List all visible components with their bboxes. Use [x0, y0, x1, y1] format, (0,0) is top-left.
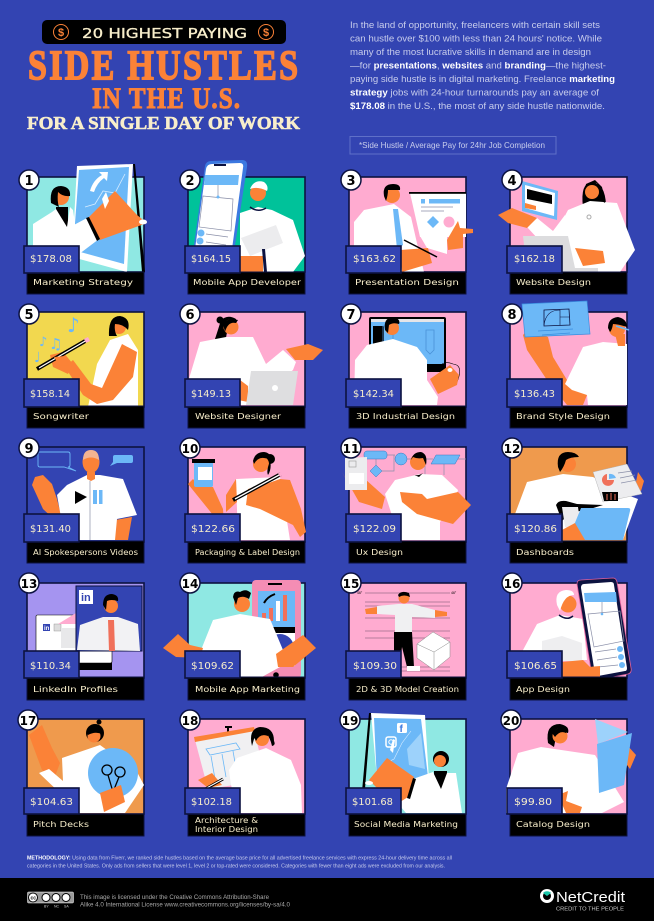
methodology: METHODOLOGY: Using data from Fiverr, we ranked side hustles based on the average base price for all advertised freelance services with express 24-hour delivery time across all: [27, 856, 452, 862]
header banner: 20 highest paying: [42, 20, 286, 44]
card 19: Social Media Marketing: 19: [342, 714, 358, 728]
illustration: 3D model figure and cube: 46°: [451, 591, 457, 595]
illustration: woman holding brand sheet: [522, 301, 629, 405]
card 20: Catalog Design: $99.80: [514, 797, 552, 808]
card 5: Songwriter: 5: [24, 308, 34, 323]
illustration: 3D model figure and cube: 46°: [357, 591, 363, 595]
card 11: UX Design: 11: [343, 442, 359, 456]
card 2: Mobile App Developer: Mobile App Developer: [193, 278, 302, 287]
card 12: Dashboards: $120.86: [514, 524, 557, 535]
label text: Interior Design: [195, 825, 258, 834]
card 10: Packaging & Label Design: [180, 438, 306, 563]
card 7: 3D Industrial Design: 7: [346, 308, 356, 323]
card 11: UX Design: Ux Design: [356, 548, 403, 557]
intro paragraph: paying side hustle is in digital marketing. Freelance marketing: [350, 73, 615, 84]
license badge: cc: [30, 896, 36, 902]
card 3: Presentation Design: Presentation Design: [355, 278, 459, 287]
card 9: AI Spokespersons Videos: $131.40: [30, 524, 71, 535]
card 3: Presentation Design: [341, 170, 473, 294]
intro paragraph: [350, 19, 615, 111]
header banner: 20 highest paying: $: [263, 27, 269, 39]
intro paragraph: strategy jobs with 24-hour turnarounds pay an average of: [350, 86, 599, 98]
card 19: Social Media Marketing: $101.68: [352, 797, 393, 808]
card 14: Mobile App Marketing: $109.62: [191, 661, 234, 672]
illustration: songwriter with pencil and notes: [34, 313, 138, 407]
card 9: AI Spokespersons Videos: [19, 438, 144, 563]
card 7: 3D Industrial Design: [341, 304, 466, 428]
license text: This image is licensed under the Creative Commons Attribution-Share: [80, 894, 269, 901]
illustration: woman with idea bulb: [29, 720, 144, 813]
intro paragraph: can hustle over $100 with less than 24 hours' notice. While: [350, 32, 602, 44]
illustration: woman with jar and pencil: [188, 452, 306, 540]
card 18: Architecture & Interior Design: [180, 710, 305, 836]
illustration: woman at chart board: [33, 164, 147, 272]
card 8: Brand Style Design: $136.43: [514, 389, 555, 400]
title: side hustles: SIDE HUSTLES: [28, 43, 298, 89]
card 17: Pitch Decks: $104.63: [30, 797, 73, 808]
intro paragraph: $178.08 in the U.S., the most of any side hustle nationwide.: [350, 100, 605, 111]
NetCredit logo: CREDIT TO THE PEOPLE: [556, 906, 624, 912]
illustration: man holding catalog: [506, 719, 636, 813]
card 9: AI Spokespersons Videos: AI Spokespersons Videos: [33, 548, 138, 557]
header banner: 20 highest paying: 20 HIGHEST PAYING: [82, 27, 247, 42]
card 14: Mobile App Marketing: Mobile App Marketing: [195, 685, 300, 694]
card 16: App Design: App Design: [516, 685, 570, 694]
card 10: Packaging & Label Design: Packaging & Label Design: [195, 548, 300, 557]
card 16: App Design: [502, 573, 631, 700]
card 14: Mobile App Marketing: [163, 573, 316, 700]
card 18: Architecture & Interior Design: 18: [182, 714, 198, 728]
card 15: 2D & 3D Model Creation: $109.30: [353, 661, 397, 672]
card 13: LinkedIn Profiles: [19, 573, 144, 700]
illustration: designer at monitor: [354, 317, 460, 405]
card 12: Dashboards: [502, 438, 644, 563]
card 2: Mobile App Developer: 2: [185, 174, 195, 189]
card 18: Architecture & Interior Design: $102.18: [191, 797, 232, 808]
license text: Alike 4.0 International License www.creativecommons.org/licenses/by-sa/4.0: [80, 902, 290, 908]
illustration: 3D model figure and cube: [357, 591, 457, 671]
card 8: Brand Style Design: Brand Style Design: [516, 412, 610, 421]
card 16: App Design: $106.65: [514, 661, 557, 672]
illustration: LinkedIn profile: in: [81, 592, 91, 604]
card 7: 3D Industrial Design: $142.34: [353, 389, 394, 400]
card 13: LinkedIn Profiles: 13: [21, 577, 37, 591]
card 13: LinkedIn Profiles: $110.34: [30, 661, 71, 672]
header banner: 20 highest paying: $: [58, 27, 64, 39]
card 2: Mobile App Developer: [180, 160, 305, 294]
card 4: Website Design: Website Design: [516, 278, 591, 287]
illustration: developer and phone: [193, 160, 305, 272]
illustration: LinkedIn profile: [36, 586, 142, 670]
intro paragraph: —for presentations, websites and branding—the highest-: [350, 60, 606, 70]
card 1: Marketing Strategy: $178.08: [30, 254, 72, 265]
label text: [195, 816, 258, 834]
title: in the U.S.: IN THE U.S.: [92, 81, 240, 115]
illustration: woman with laptop and screen: [498, 180, 635, 272]
card 1: Marketing Strategy: 1: [24, 174, 34, 189]
card 20: Catalog Design: [501, 710, 636, 836]
license badge: SA: [64, 904, 69, 908]
illustration: social media board: f: [400, 724, 404, 735]
methodology: [27, 856, 452, 870]
illustration: marketer and phone: [163, 580, 316, 678]
NetCredit logo: NetCredit: [556, 889, 626, 906]
illustration: UX designer with flowchart: [342, 451, 471, 540]
card 8: Brand Style Design: [502, 301, 629, 428]
card 1: Marketing Strategy: Marketing Strategy: [33, 278, 134, 287]
card 6: Website Designer: [180, 304, 323, 428]
intro paragraph: In the land of opportunity, freelancers with certain skill sets: [350, 19, 600, 30]
card 17: Pitch Decks: 17: [20, 714, 36, 728]
card 17: Pitch Decks: [18, 710, 144, 836]
card 4: Website Design: 4: [507, 174, 517, 189]
card 10: Packaging & Label Design: $122.66: [191, 524, 235, 535]
card 19: Social Media Marketing: [340, 710, 466, 836]
card 20: Catalog Design: 20: [503, 714, 519, 728]
license badge: [28, 892, 74, 908]
card 15: 2D & 3D Model Creation: [341, 573, 466, 700]
illustration: songwriter with pencil and notes: ♪: [39, 335, 47, 350]
subtitle: FOR A SINGLE DAY OF WORK: [27, 113, 300, 133]
card 12: Dashboards: Dashboards: [516, 548, 574, 557]
intro paragraph: many of the most lucrative skills in demand are in design: [350, 46, 591, 57]
card 9: AI Spokespersons Videos: 9: [24, 442, 34, 457]
illustration: man with reports and tablet: [515, 452, 644, 540]
card 6: Website Designer: $149.13: [191, 389, 231, 400]
card 11: UX Design: [341, 438, 471, 563]
card 5: Songwriter: Songwriter: [33, 412, 90, 421]
card 17: Pitch Decks: Pitch Decks: [33, 820, 89, 829]
card 16: App Design: 16: [504, 577, 520, 591]
illustration: architect at drawing board: [194, 727, 302, 813]
methodology: categories in the United States. Only ads from sellers that were level 1, level 2 or top-rated were considered. Categories with fewer than eight ads were excluded from our analysis.: [27, 864, 445, 870]
card 11: UX Design: $122.09: [353, 524, 396, 535]
card 6: Website Designer: 6: [185, 308, 195, 323]
card 13: LinkedIn Profiles: LinkedIn Profiles: [33, 685, 118, 694]
card 2: Mobile App Developer: $164.15: [191, 254, 231, 265]
license badge: NC: [54, 904, 60, 908]
illustration: songwriter with pencil and notes: ♪: [67, 313, 80, 337]
card 5: Songwriter: [19, 304, 144, 428]
card 6: Website Designer: Website Designer: [195, 412, 282, 421]
card 1: Marketing Strategy: [19, 164, 147, 294]
illustration: LinkedIn profile: in: [44, 626, 50, 632]
card 8: Brand Style Design: 8: [507, 308, 517, 323]
card 15: 2D & 3D Model Creation: 2D & 3D Model Creation: [356, 685, 459, 694]
card 7: 3D Industrial Design: 3D Industrial Design: [356, 412, 455, 421]
legend note: [350, 136, 556, 154]
illustration: AI spokesperson: [32, 450, 137, 540]
NetCredit logo: [542, 889, 626, 912]
card 3: Presentation Design: 3: [346, 174, 356, 189]
illustration: songwriter with pencil and notes: ♩: [34, 350, 41, 366]
card 12: Dashboards: 12: [504, 442, 520, 456]
label text: Architecture &: [195, 816, 258, 825]
footer bar: [0, 878, 654, 921]
illustration: woman with laptop: [188, 316, 323, 405]
illustration: app designer with phone: [523, 578, 631, 680]
legend note: *Side Hustle / Average Pay for 24hr Job Completion: [359, 140, 545, 150]
illustration: songwriter with pencil and notes: ♫: [49, 335, 62, 353]
card 19: Social Media Marketing: Social Media Marketing: [354, 820, 458, 829]
card 4: Website Design: $162.18: [514, 254, 555, 265]
license text: [80, 894, 290, 908]
license badge: BY: [44, 904, 49, 908]
card 3: Presentation Design: $163.62: [353, 254, 396, 265]
card 4: Website Design: [498, 170, 635, 294]
illustration: presenter and board: [354, 184, 473, 272]
card 15: 2D & 3D Model Creation: 15: [343, 577, 359, 591]
card 5: Songwriter: $158.14: [30, 389, 70, 400]
card 20: Catalog Design: Catalog Design: [516, 820, 590, 829]
card 14: Mobile App Marketing: 14: [182, 577, 198, 591]
card 10: Packaging & Label Design: 10: [182, 442, 198, 456]
